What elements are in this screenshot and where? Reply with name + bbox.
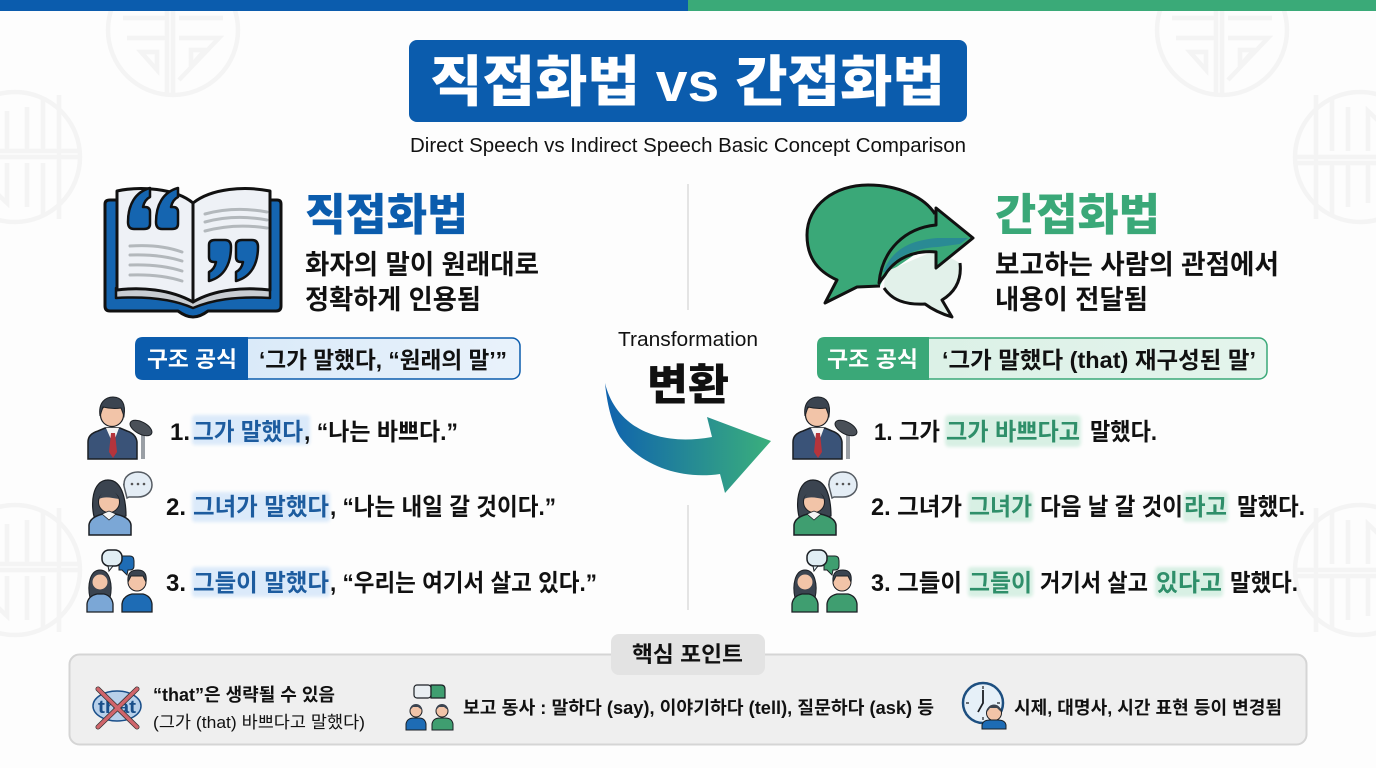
example 2: direct: [89, 472, 556, 535]
sentence 3: , “우리는 여기서 살고 있다.”: [330, 570, 597, 597]
icon: man with microphone: [88, 397, 154, 459]
description: direct speech: 화자의 말이 원래대로: [305, 250, 539, 280]
point 1 text: [153, 685, 365, 732]
description: direct speech: [305, 250, 539, 315]
title banner: 직접화법 vs 간접화법: [430, 51, 945, 113]
sentence 1: 1.: [170, 419, 190, 446]
example 1: direct: [88, 397, 458, 459]
example 2: indirect: [794, 472, 1305, 535]
sentence 2: 그녀가 말했다: [193, 494, 329, 521]
description: indirect speech: 내용이 전달됨: [995, 285, 1148, 315]
sentence 2: 2. 그녀가: [871, 494, 962, 521]
sentence 3: 3. 그들이: [871, 570, 962, 597]
example 3: direct: [87, 550, 597, 612]
icon: that crossed out: [93, 689, 141, 727]
point 1 text: “that”은 생략될 수 있음: [153, 685, 335, 705]
structure formula: direct: ‘그가 말했다, “원래의 말’”: [259, 347, 507, 373]
sentence 1: 그가 말했다: [193, 419, 303, 446]
panel: direct speech: [87, 188, 597, 612]
highlight: speaker clause: [192, 567, 330, 597]
highlight: changed clause: [945, 415, 1081, 447]
sentence 3: 그들이 말했다: [193, 570, 329, 597]
sentence 2: 다음 날 갈 것이: [1040, 494, 1183, 521]
sentence 1: 1. 그가: [874, 419, 940, 446]
structure formula: direct: 구조 공식: [147, 347, 237, 372]
key points tag: [611, 634, 765, 675]
title banner: [409, 40, 967, 122]
sentence 1: , “나는 바쁘다.”: [304, 419, 458, 446]
icon: woman with speech bubble: [794, 472, 857, 535]
example 3: indirect: [792, 550, 1298, 612]
point 3 text: 시제, 대명사, 시간 표현 등이 변경됨: [1014, 698, 1282, 718]
highlight: speaker clause: [192, 492, 330, 522]
structure formula: indirect: ‘그가 말했다 (that) 재구성된 말’: [942, 347, 1256, 373]
sentence 3: 그들이: [969, 570, 1032, 597]
label: Transformation: Transformation: [618, 329, 758, 351]
arrow: direct to indirect: [605, 383, 771, 493]
panel: key points: [70, 634, 1306, 744]
description: indirect speech: [995, 250, 1279, 315]
point 2 text: 보고 동사 : 말하다 (say), 이야기하다 (tell), 질문하다 (ask) 등: [463, 698, 934, 718]
sentence 2: 말했다.: [1237, 494, 1305, 521]
key points background: [70, 654, 1306, 744]
sentence 2: 라고: [1184, 494, 1227, 521]
description: direct speech: 정확하게 인용됨: [305, 285, 481, 315]
icon: man with microphone: [793, 397, 859, 459]
center transformation: [605, 329, 771, 493]
highlights: changed words: [968, 567, 1223, 597]
top colour bar: [0, 0, 1376, 11]
icon: two people talking: [792, 550, 857, 612]
sentence 2: 그녀가: [969, 494, 1032, 521]
icon: that crossed out: that: [98, 697, 136, 717]
icon: speech bubbles with arrow: [807, 185, 973, 317]
highlights: changed words: [968, 492, 1228, 522]
icon: woman with speech bubble: [89, 472, 152, 535]
panel: indirect speech: [792, 185, 1305, 612]
sentence 3: 3.: [166, 570, 186, 597]
center divider: [687, 184, 689, 610]
description: indirect speech: 보고하는 사람의 관점에서: [995, 250, 1279, 280]
structure formula: direct: [135, 337, 520, 380]
sentence 3: 거기서 살고: [1040, 570, 1148, 597]
sentence 3: 있다고: [1156, 570, 1222, 597]
highlight: speaker clause: [192, 415, 310, 445]
sentence 1: 말했다.: [1090, 419, 1157, 446]
sentence 2: 2.: [166, 494, 186, 521]
structure formula: indirect: 구조 공식: [827, 347, 918, 372]
subtitle: Direct Speech vs Indirect Speech Basic Concept Comparison: [410, 135, 966, 157]
key points tag: 핵심 포인트: [632, 642, 743, 667]
heading: direct speech: 직접화법: [305, 191, 468, 240]
icon: two people reporting: [406, 685, 453, 730]
sentence 1: 그가 바쁘다고: [946, 419, 1080, 446]
example 1: indirect: [793, 397, 1157, 459]
sentence 3: 말했다.: [1230, 570, 1298, 597]
sentence 2: , “나는 내일 갈 것이다.”: [330, 494, 556, 521]
heading: indirect speech: 간접화법: [995, 191, 1160, 240]
label: 변환: 변환: [647, 362, 729, 410]
icon: clock and person: [963, 683, 1006, 729]
structure formula: indirect: [817, 337, 1267, 380]
icon: two people talking: [87, 550, 152, 612]
icon: open book with quotes: [105, 188, 281, 317]
point 1 text: (그가 (that) 바쁘다고 말했다): [153, 713, 365, 732]
